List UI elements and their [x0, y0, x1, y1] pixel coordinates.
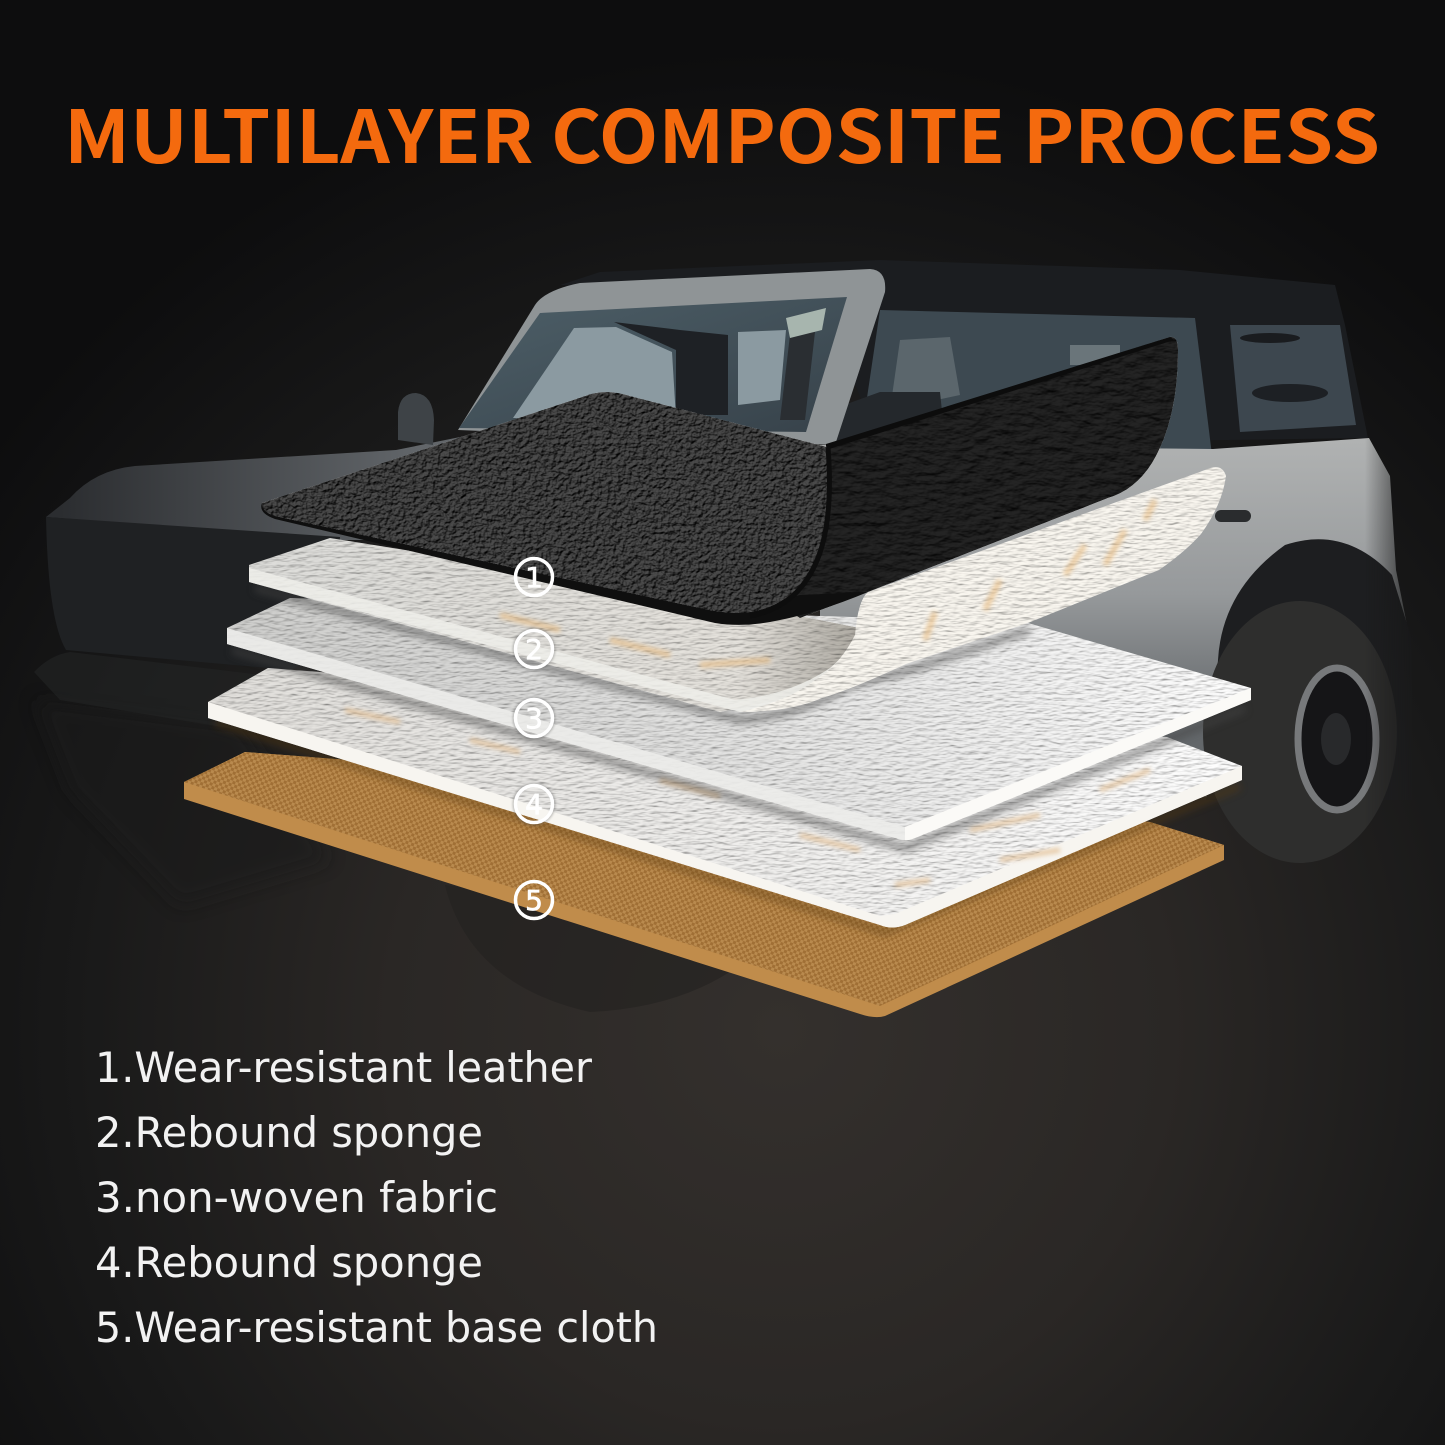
windshield [459, 297, 847, 432]
marker 5: 5 [525, 884, 543, 917]
legend item 3: 3.non-woven fabric [95, 1173, 498, 1222]
vehicle reflection [628, 947, 728, 1008]
wing mirror [398, 393, 434, 445]
windshield frame [458, 269, 885, 445]
legend item 2: 2.Rebound sponge [95, 1108, 483, 1157]
marker 2: 2 [525, 633, 543, 666]
marker 1: 1 [525, 561, 543, 594]
layer 1: wear-resistant leather [261, 337, 1178, 625]
front grille [46, 517, 340, 670]
marker 1 [516, 558, 552, 596]
title: MULTILAYER COMPOSITE PROCESS [64, 79, 1380, 185]
layer 4: rebound sponge [208, 668, 1242, 928]
layer 3 shadow on layer 4 [232, 650, 1245, 848]
leather edge [261, 503, 868, 625]
layer number markers [514, 558, 554, 918]
layer 2 shadow on layer 3 [255, 588, 1030, 720]
wheel arch [1206, 539, 1412, 800]
layer 5: base cloth [184, 752, 1224, 1017]
layer 2: curled rebound sponge [249, 467, 1226, 712]
tyre [1203, 601, 1397, 863]
door handle [1215, 510, 1251, 522]
marker 3 [514, 698, 554, 738]
roof [560, 260, 1368, 445]
marker 4 [514, 784, 554, 824]
legend item 5: 5.Wear-resistant base cloth [95, 1303, 658, 1352]
leather curled back [790, 337, 1178, 618]
car side body [820, 438, 1410, 800]
material layer stack [184, 337, 1251, 1017]
legend item 1: 1.Wear-resistant leather [95, 1043, 593, 1092]
marker 4: 4 [525, 788, 543, 821]
marker 5 [516, 882, 552, 918]
legend list [95, 1043, 658, 1352]
layer 3: non-woven fabric [227, 598, 1251, 840]
leather front panel [262, 392, 828, 613]
leather fold seam [750, 447, 829, 616]
rear window [1230, 325, 1356, 432]
marker 3: 3 [525, 702, 543, 735]
layer 4 shadow on base cloth [215, 722, 1240, 932]
wheel rim [1298, 668, 1376, 810]
hood [46, 435, 520, 540]
legend item 4: 4.Rebound sponge [95, 1238, 483, 1287]
background vehicle [34, 260, 1412, 1012]
door window [836, 310, 1212, 449]
front bumper [34, 652, 176, 708]
marker 2 [514, 629, 554, 669]
